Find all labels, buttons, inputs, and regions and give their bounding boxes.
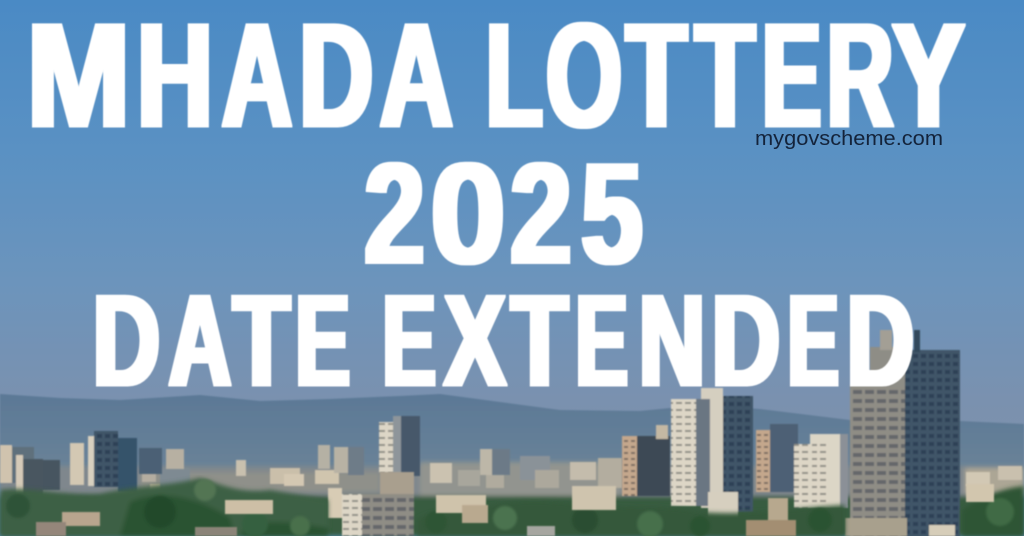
title line: DATE EXTENDED: E: [576, 268, 628, 414]
title line: DATE EXTENDED: D: [712, 268, 780, 414]
left towers: [0, 416, 510, 497]
title line: DATE EXTENDED: D: [847, 268, 914, 414]
title line: DATE EXTENDED: E: [788, 268, 838, 414]
title line: DATE EXTENDED: A: [169, 268, 231, 414]
title line: 2025: 5: [581, 134, 643, 294]
small distant buildings: [142, 456, 1022, 494]
title line: DATE EXTENDED: T: [511, 268, 568, 414]
title line: DATE EXTENDED: N: [639, 268, 705, 414]
right cluster towers: [622, 330, 960, 536]
foreground buildings: [36, 484, 994, 536]
title line: 2025: 2: [364, 134, 425, 294]
hazy low-rise backdrop: [0, 462, 1024, 536]
title line: 2025: 2: [510, 134, 572, 294]
title line: 2025: 0: [430, 134, 506, 294]
central foreground block: [328, 472, 414, 536]
city skyline: [0, 330, 1024, 536]
title line: DATE EXTENDED: T: [233, 268, 290, 414]
title line: DATE EXTENDED: D: [93, 268, 160, 414]
title line: DATE EXTENDED: E: [296, 268, 350, 414]
title: [27, 0, 965, 414]
title line: DATE EXTENDED: E: [383, 268, 436, 414]
distant mountains: [0, 394, 1024, 490]
website watermark: mygovscheme.com: [755, 128, 943, 150]
tree canopy texture: [6, 479, 1014, 536]
trees: [0, 478, 1024, 536]
title line: DATE EXTENDED: X: [444, 268, 506, 414]
